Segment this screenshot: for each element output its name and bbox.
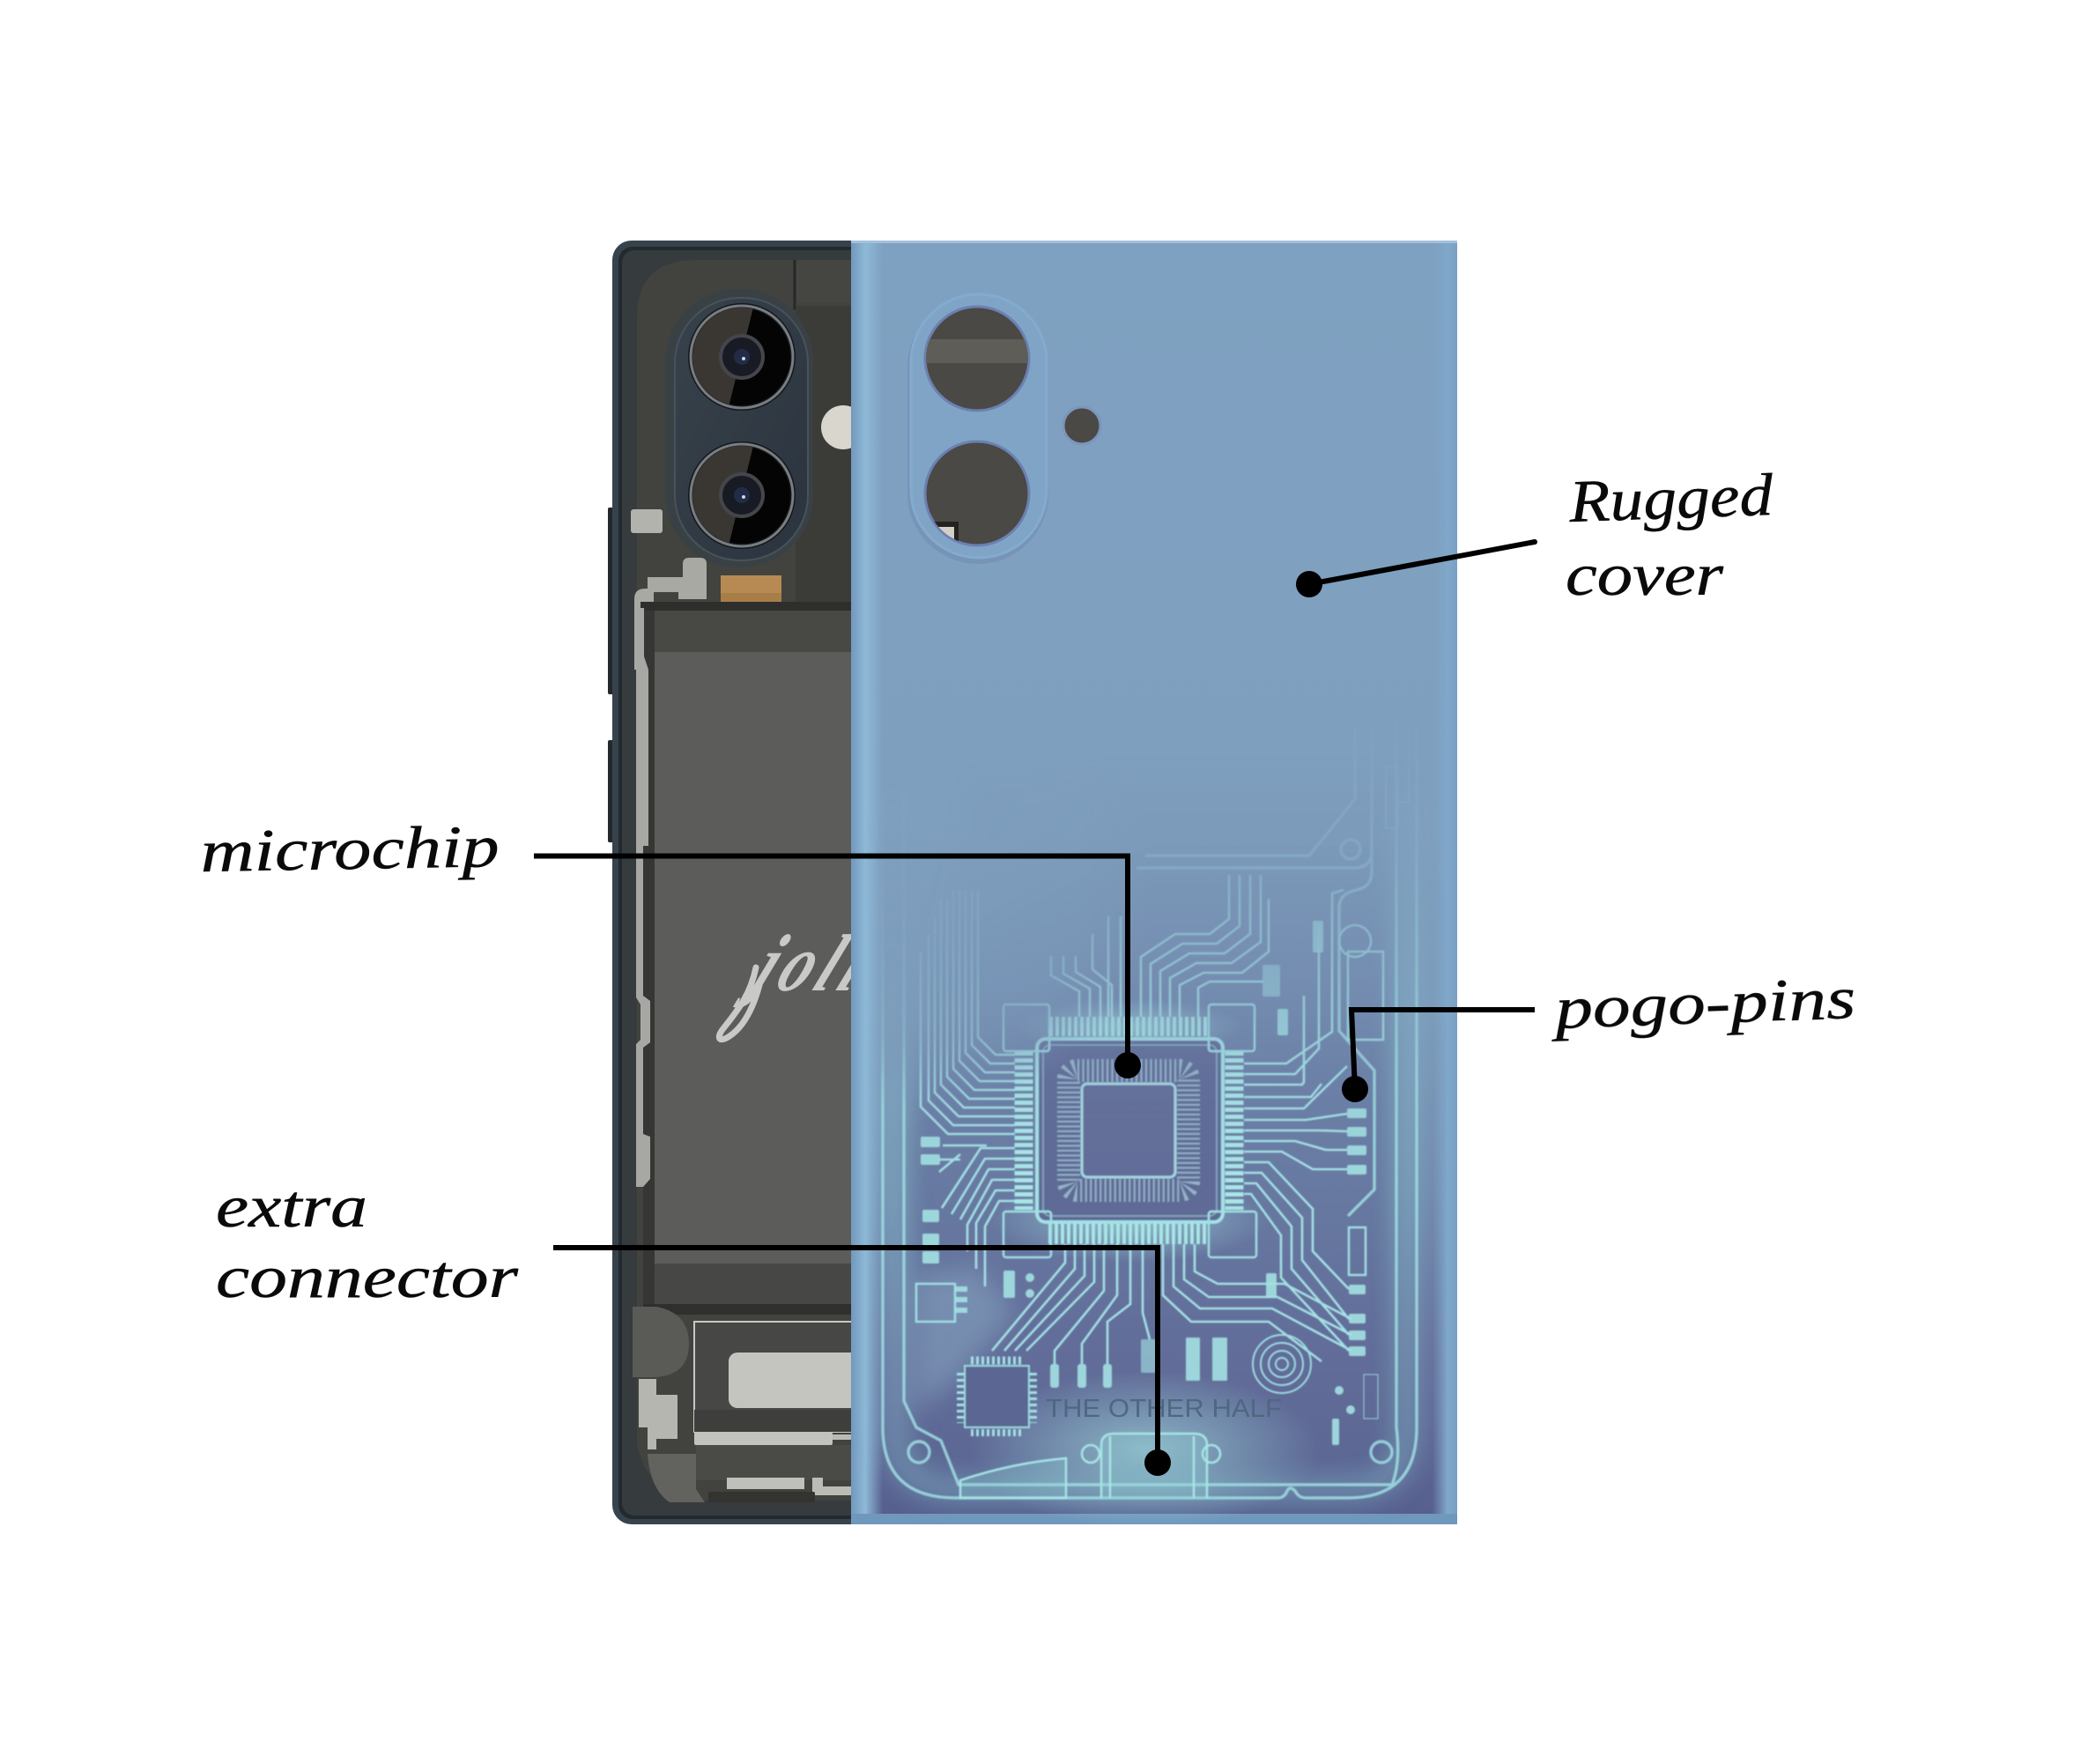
usb connector (960, 1434, 1220, 1498)
cover bottom lip (851, 1514, 1457, 1524)
phone frame (612, 241, 851, 1524)
label: pogo-pins: pogo-pins (1550, 964, 1856, 1041)
camera cut-out surround (907, 296, 1048, 564)
microphone hole (1063, 407, 1100, 444)
label: rugged cover: cover (1566, 541, 1724, 608)
inner chassis panel (637, 260, 863, 1501)
side buttons (608, 508, 612, 842)
rugged cover: translucent right half (851, 241, 1457, 1524)
side metal strip (636, 608, 650, 1187)
cover right edge highlight (1433, 241, 1457, 1524)
label: extra connector: extra (216, 1173, 367, 1240)
label: extra connector (216, 1173, 519, 1310)
callout: extra connector (553, 1248, 1171, 1476)
callout: rugged cover (1296, 542, 1535, 597)
printed text on board: THE OTHER HALF (1046, 1395, 1282, 1423)
bottom bay (633, 1307, 862, 1502)
jolla logo: jolla (731, 919, 929, 1009)
callout: pogo-pins (1342, 1010, 1535, 1102)
metal ground trace (634, 558, 707, 670)
grey contact pad (631, 509, 663, 533)
speaker coil (1253, 1335, 1311, 1393)
package pins (1024, 1027, 1234, 1234)
circuit board seen through the cover (876, 841, 1428, 1517)
label: rugged cover: Rugged (1567, 461, 1774, 535)
glow bottom (987, 1378, 1303, 1516)
speaker block (729, 1353, 861, 1408)
board outlines (881, 794, 1418, 1501)
microchip (1037, 1039, 1223, 1222)
lower lens (688, 441, 796, 549)
upper lens (688, 303, 796, 411)
label: rugged cover (1566, 461, 1774, 608)
label: extra connector: connector (216, 1243, 519, 1310)
camera island (665, 289, 813, 567)
label: microchip: microchip (200, 812, 500, 885)
upper camera hole (923, 307, 1031, 411)
secondary chip (960, 1360, 1033, 1433)
flash lamp (821, 405, 851, 449)
battery (640, 602, 851, 1315)
phone internals: exposed left half (608, 241, 851, 1524)
lower camera hole (925, 441, 1029, 548)
callout: microchip (534, 856, 1141, 1078)
board shading (893, 775, 1408, 1491)
cover left edge highlight (851, 241, 883, 1524)
trace bundles (921, 875, 1351, 1364)
discrete components (921, 921, 1378, 1445)
copper flex connector (721, 575, 781, 602)
side ground pads (916, 925, 1383, 1322)
